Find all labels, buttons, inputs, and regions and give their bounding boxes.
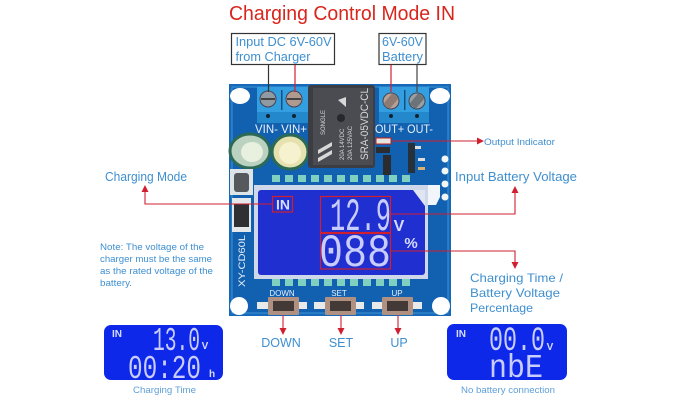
- relay: 20A 125VAC: [348, 125, 354, 160]
- button labels: DOWN: [261, 336, 301, 350]
- button labels: SET: [329, 336, 354, 350]
- arrow: up button: [394, 315, 402, 335]
- LCD voltage reading: V: [394, 218, 405, 235]
- terminal labels: VIN- VIN+: [255, 122, 307, 136]
- label: charging time / battery voltage percentage: Battery Voltage: [470, 286, 560, 300]
- inductor: [230, 169, 253, 195]
- callout: battery: [379, 34, 426, 64]
- arrow: set button: [338, 315, 344, 335]
- note text: charger must be the same: [100, 254, 212, 264]
- note text: battery.: [100, 278, 132, 288]
- connector lines from top callouts: [268, 65, 417, 92]
- buttons: UP: [391, 289, 403, 298]
- capacitors: [230, 134, 308, 169]
- buttons: DOWN: [269, 289, 295, 298]
- lcd example: charging time: V: [202, 341, 209, 352]
- callout: battery: 6V-60V: [382, 35, 424, 49]
- callout: input DC from charger: [232, 34, 334, 64]
- button labels: [261, 336, 408, 350]
- title: Charging Control Mode IN: [229, 3, 455, 25]
- caption: charging time: Charging Time: [133, 385, 196, 395]
- relay: SONGLE: [321, 110, 327, 135]
- buttons: [257, 289, 422, 315]
- LCD percentage reading: 088: [319, 228, 391, 280]
- LCD voltage reading: 12.9: [330, 192, 391, 244]
- smd components and output LED: [376, 138, 425, 175]
- circuit board module: [229, 84, 451, 316]
- diode: [232, 198, 251, 232]
- header pads: [442, 156, 448, 200]
- note text: Note: The voltage of the: [100, 242, 204, 252]
- label: charging mode: Charging Mode: [105, 170, 187, 184]
- arrow: down button: [280, 315, 286, 335]
- callout: input DC from charger: Input DC 6V-60V: [236, 35, 332, 49]
- LCD display: [254, 185, 440, 280]
- lcd example: no battery: nbE: [489, 350, 543, 387]
- label: charging time / battery voltage percentage: [470, 271, 564, 315]
- relay: 20A 14VDC: [340, 128, 346, 160]
- lcd example: charging time: h: [209, 369, 215, 380]
- LCD voltage reading: [320, 192, 405, 244]
- circuit board module: OUT+ OUT-: [375, 122, 433, 136]
- arrow: output indicator: [392, 138, 484, 144]
- relay: [308, 85, 375, 168]
- label: charging time / battery voltage percentage: Percentage: [470, 301, 533, 315]
- lcd example: no battery: [447, 323, 567, 387]
- LCD pins top: [272, 175, 410, 182]
- label: input battery voltage: Input Battery Voltage: [455, 170, 577, 184]
- LCD mode indicator: IN: [276, 196, 290, 212]
- arrow: charging time percentage: [390, 251, 518, 269]
- arrow: charging mode: [142, 185, 273, 204]
- lcd example: charging time: 13.0: [153, 323, 200, 360]
- LCD percentage reading: %: [404, 235, 418, 252]
- label: output indicator: Output Indicator: [484, 137, 555, 148]
- lcd example: charging time: 00:20: [128, 351, 201, 388]
- note text: [100, 242, 213, 288]
- callout: input DC from charger: from Charger: [236, 50, 310, 64]
- mounting holes: [230, 88, 450, 315]
- board name: XY-CD60L: [237, 235, 248, 287]
- relay: SRA-05VDC-CL: [359, 88, 371, 160]
- LCD pins bottom: [272, 279, 410, 286]
- label: charging time / battery voltage percentage: Charging Time /: [470, 271, 564, 285]
- callout: battery: Battery: [382, 50, 424, 64]
- caption: no battery connection: No battery connection: [461, 385, 555, 395]
- note text: as the rated voltage of the: [100, 266, 213, 276]
- lcd example: charging time: [104, 323, 223, 388]
- right terminal block: [379, 87, 429, 123]
- lcd example: charging time: IN: [112, 329, 122, 340]
- left terminal block: [257, 87, 308, 123]
- lcd example: no battery: IN: [456, 329, 466, 340]
- arrow: battery voltage: [390, 186, 518, 214]
- button labels: UP: [390, 336, 408, 350]
- lcd example: no battery: 00.0: [489, 323, 545, 361]
- buttons: SET: [331, 289, 347, 298]
- lcd example: no battery: V: [547, 342, 554, 353]
